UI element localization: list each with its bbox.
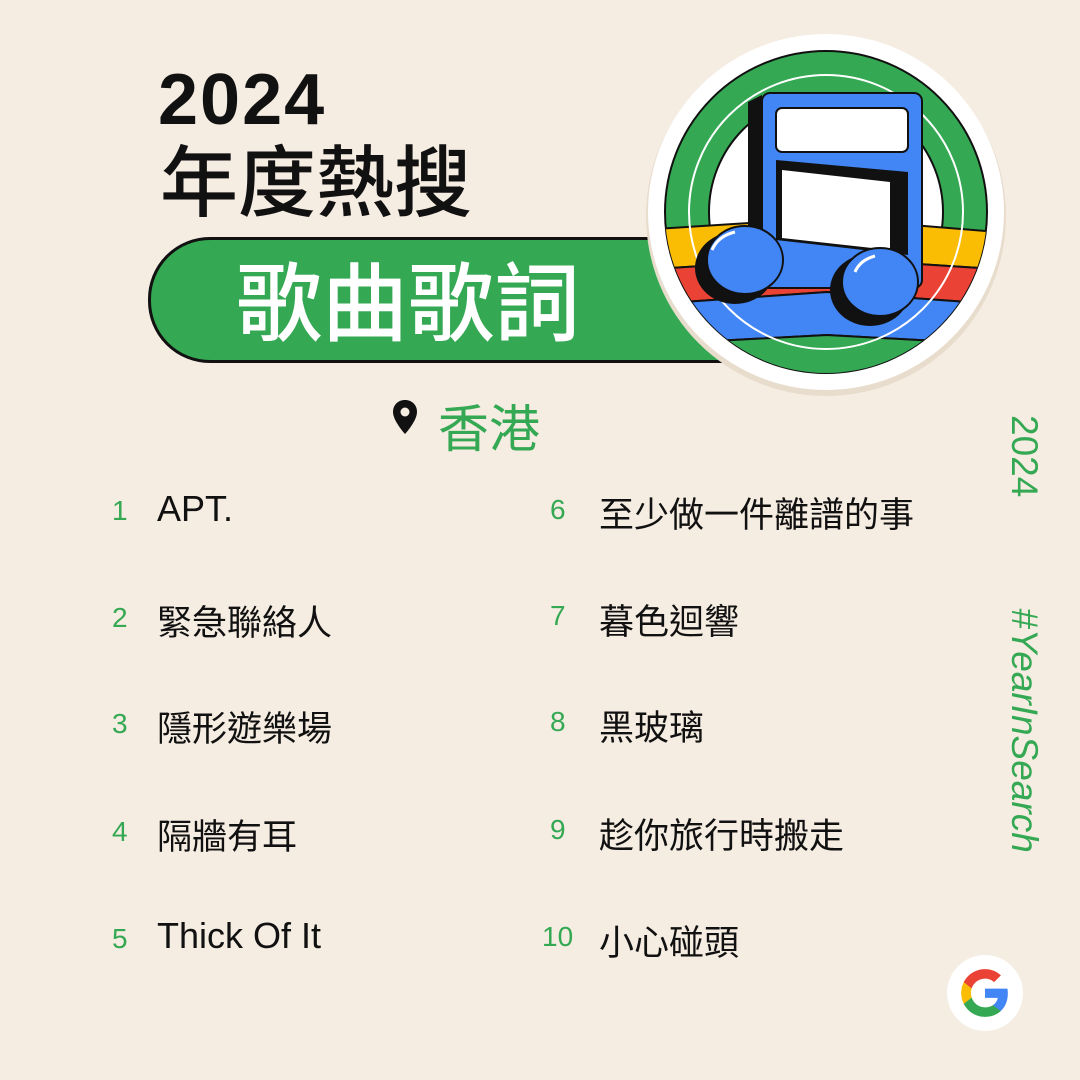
list left: 5 [112,923,128,954]
list right: 7 [550,600,566,631]
list left: 4 [112,816,128,847]
list right: 小心碰頭 [599,924,739,963]
icon: google logo [947,955,1023,1031]
side text: #YearInSearch [1004,608,1045,853]
list left: 緊急聯絡人 [157,604,332,643]
list left: APT. [157,488,233,529]
list right: 8 [550,706,566,737]
location text: 香港 [438,388,540,462]
side text: 2024 [1004,415,1045,497]
icon: pin [393,400,417,434]
title: subtitle: 年度熱搜 [160,121,472,233]
list left: 1 [112,495,128,526]
list right [542,494,914,963]
list left: Thick Of It [157,915,321,956]
list right: 6 [550,494,566,525]
list right: 至少做一件離譜的事 [599,496,914,535]
note [695,93,922,326]
pill label: 歌曲歌詞 [236,234,580,359]
list left: 2 [112,602,128,633]
list right: 9 [550,814,566,845]
list right: 10 [542,921,573,952]
list left [112,488,332,956]
side text [1004,415,1045,853]
list right: 黑玻璃 [599,709,704,748]
title: year: 2024 [158,60,326,140]
list right: 趁你旅行時搬走 [599,817,844,856]
badge: music note [646,34,1006,396]
list left: 3 [112,708,128,739]
category pill [148,237,794,363]
location [393,388,540,462]
list left: 隱形遊樂場 [157,710,332,749]
list right: 暮色迴響 [599,603,739,642]
list left: 隔牆有耳 [157,818,297,857]
